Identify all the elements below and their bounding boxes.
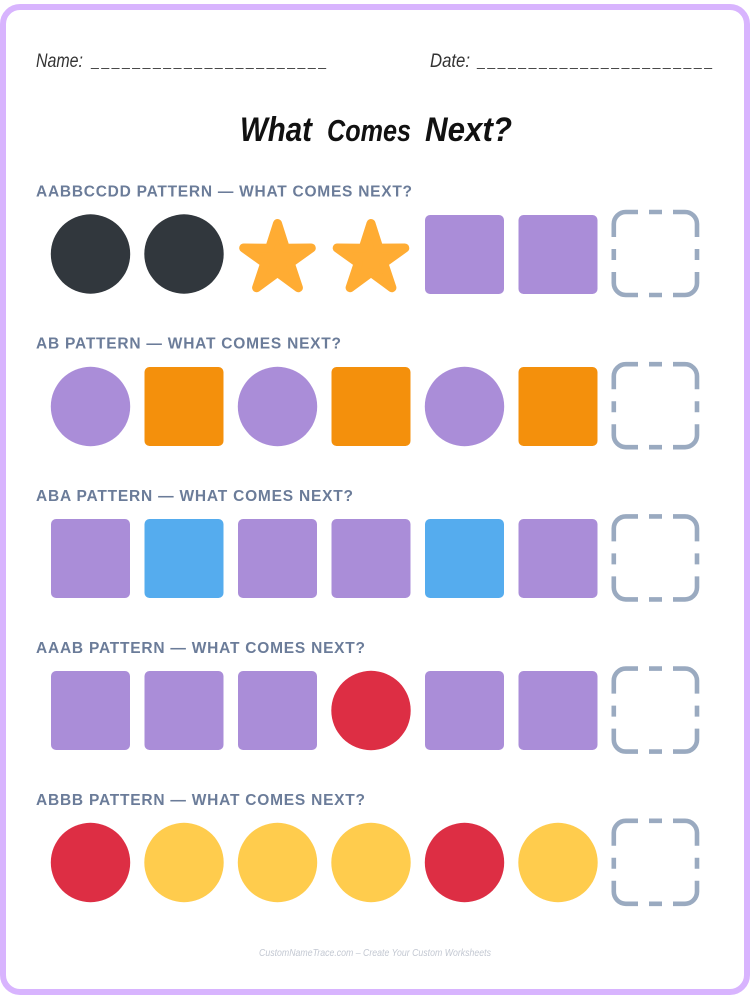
row 1 answer box (614, 212, 697, 295)
row 1: AABBCCDD pattern (36, 184, 697, 295)
row 2: AB pattern (36, 336, 697, 447)
row 2 label: AB PATTERN — WHAT COMES NEXT? (36, 336, 341, 352)
footer: CustomNameTrace.com – Create Your Custom Worksheets (259, 948, 491, 959)
row 5 shapes (51, 823, 598, 902)
title: Next? (425, 111, 512, 149)
date field: Date: (430, 51, 470, 72)
date field: _______________________ (476, 53, 712, 69)
row 3 answer box (614, 516, 697, 599)
title: What (240, 111, 313, 149)
date field (430, 51, 712, 72)
row 4 shapes (51, 671, 598, 750)
row 5 label: ABBB PATTERN — WHAT COMES NEXT? (36, 792, 365, 809)
row 4 label: AAAB PATTERN — WHAT COMES NEXT? (36, 640, 365, 657)
name field (36, 51, 326, 72)
name field: Name: (36, 51, 83, 72)
row 3 shapes (51, 519, 598, 598)
row 5: ABBB pattern (36, 792, 697, 904)
row 2 answer box (614, 364, 697, 447)
row 3 label: ABA PATTERN — WHAT COMES NEXT? (36, 488, 353, 505)
row 4: AAAB pattern (36, 640, 697, 752)
row 1 label: AABBCCDD PATTERN — WHAT COMES NEXT? (36, 184, 412, 200)
row 3: ABA pattern (36, 488, 697, 599)
row 1 shapes (51, 214, 598, 294)
row 5 answer box (614, 821, 697, 904)
name field: _______________________ (90, 53, 326, 69)
title: Comes (327, 113, 411, 148)
row 2 shapes (51, 367, 598, 446)
title (240, 111, 512, 149)
row 4 answer box (614, 669, 697, 752)
